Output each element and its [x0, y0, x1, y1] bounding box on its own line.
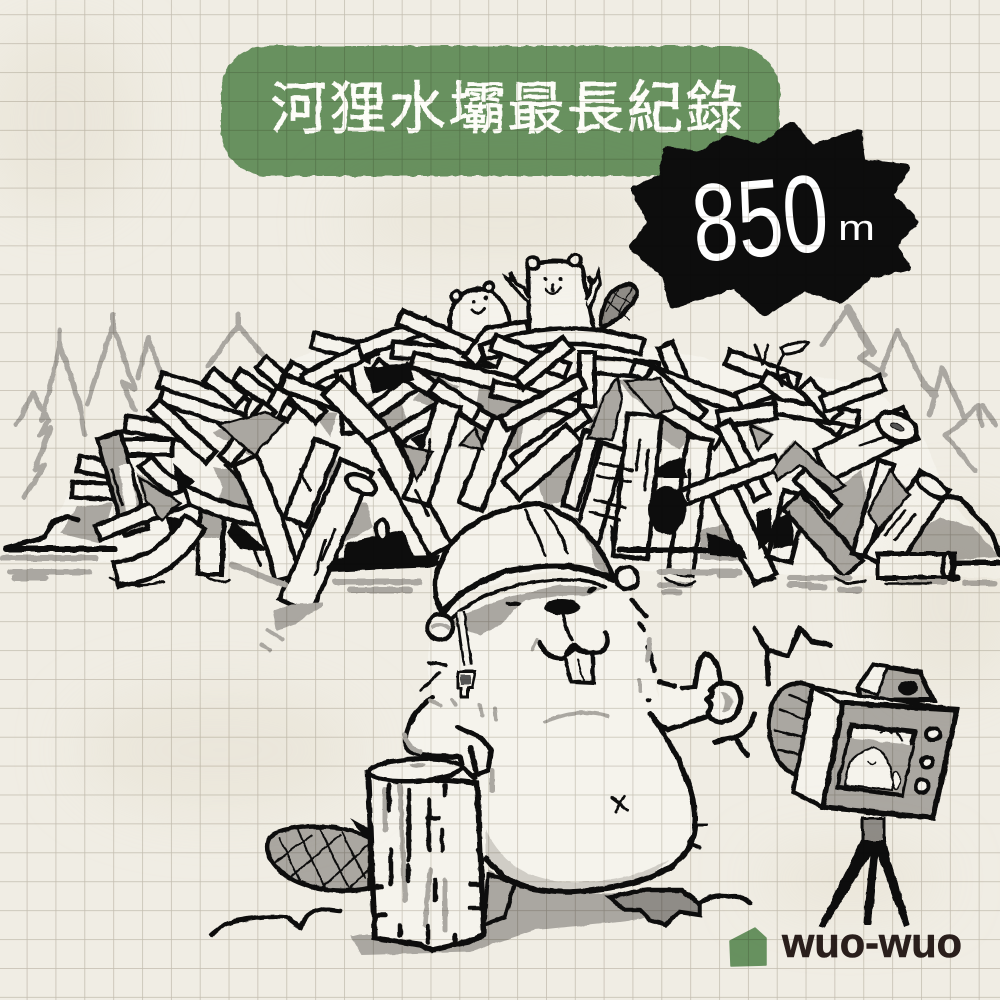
face — [430, 585, 640, 722]
pile black shadows — [165, 363, 800, 572]
body — [406, 565, 706, 892]
water reflections — [3, 558, 995, 592]
length badge — [632, 125, 915, 313]
unit: m — [838, 207, 875, 248]
camera screen — [838, 725, 915, 795]
title banner — [221, 46, 780, 176]
logo house icon — [730, 928, 766, 966]
viewfinder top — [858, 665, 933, 700]
tripod — [821, 818, 908, 926]
spiky burst — [632, 125, 915, 313]
small beaver right waving — [507, 254, 637, 345]
lens — [769, 683, 813, 775]
small beaver left on pile — [450, 282, 510, 340]
helmet — [436, 503, 614, 635]
top grey gaps between logs — [140, 378, 910, 530]
log end rings — [343, 406, 953, 579]
left arm and hand — [404, 640, 650, 790]
thick logs: lower layer — [105, 385, 942, 590]
camera buttons — [916, 728, 940, 792]
pile ground mounds — [5, 497, 1000, 563]
helmet strap and buckle — [458, 612, 475, 697]
number: 850 — [687, 151, 833, 286]
background mountains — [16, 308, 995, 497]
motion marks — [715, 628, 830, 755]
pile base fill — [0, 325, 1000, 578]
ground ink line — [5, 549, 958, 578]
main beaver with helmet — [211, 503, 750, 955]
big log shadow on ground — [262, 605, 320, 650]
small back foot — [484, 875, 515, 925]
bark marks — [112, 437, 915, 575]
log pile: dam — [0, 320, 1000, 592]
ground lines — [211, 896, 750, 935]
camera on tripod — [769, 665, 957, 926]
ears — [427, 567, 638, 640]
logo — [730, 919, 962, 966]
right foot — [610, 890, 700, 925]
pile grey shading — [60, 373, 1000, 560]
thumbs up arm — [650, 654, 741, 730]
ground shadow — [350, 870, 700, 955]
belly button mark — [612, 796, 628, 812]
top black gaps between logs — [175, 364, 795, 565]
banner shape — [221, 46, 780, 176]
sticks: upper layer — [80, 320, 875, 492]
log stump — [368, 757, 484, 950]
title text: 河狸水壩最長紀錄 — [270, 77, 745, 141]
tail — [267, 818, 370, 891]
leaf sprig — [755, 342, 808, 385]
camera body side — [793, 687, 843, 807]
logo wordmark: wuo-wuo — [781, 919, 962, 966]
camera back panel — [823, 703, 957, 818]
